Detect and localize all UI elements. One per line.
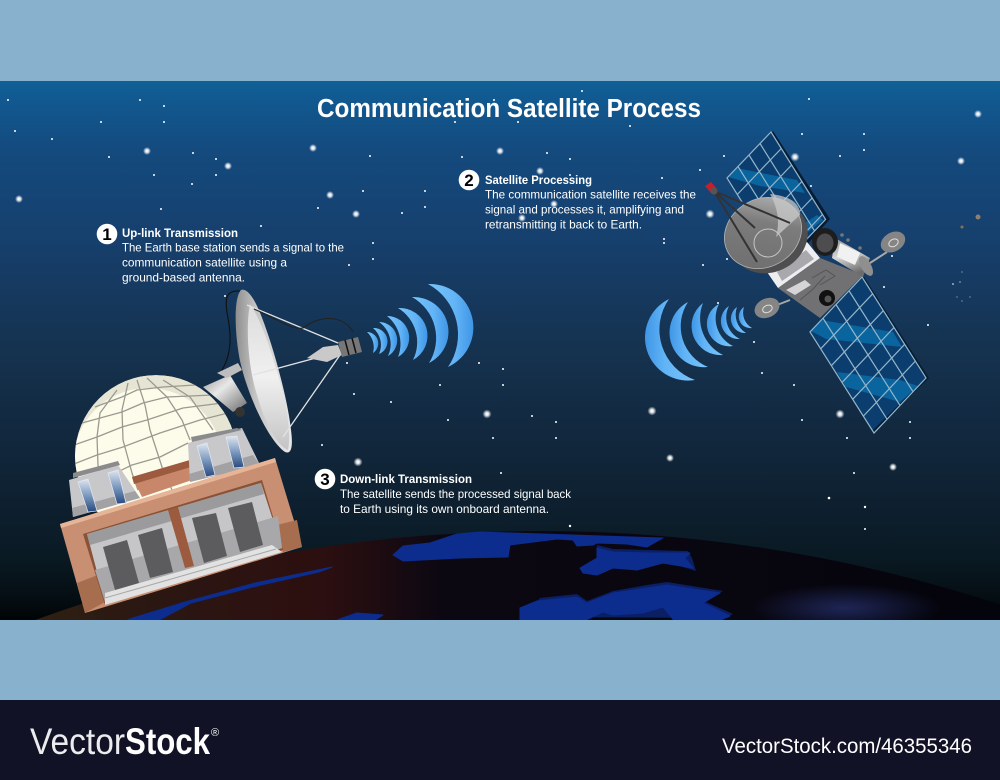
- right side annex: [188, 428, 260, 482]
- uplink signal waves: [367, 284, 473, 367]
- continent shadows: [523, 545, 733, 618]
- continents: [128, 532, 730, 620]
- step 3 heading: Down-link Transmission: [340, 472, 472, 486]
- step 1 description: The Earth base station sends a signal to the: [122, 241, 344, 255]
- VectorStock logo: Stock: [125, 721, 210, 762]
- step 2 description: signal and processes it, amplifying and: [485, 203, 684, 217]
- step 3 number badge: 3: [320, 470, 330, 489]
- satellite main dish: [711, 184, 821, 287]
- downlink signal waves: [645, 299, 752, 381]
- step 1 number badge: [97, 224, 117, 244]
- satellite: [705, 131, 929, 433]
- callout: step 2 satellite processing: [459, 170, 696, 232]
- atmospheric haze: [750, 572, 940, 620]
- dome: [75, 375, 232, 512]
- step 3 description: to Earth using its own onboard antenna.: [340, 502, 549, 516]
- step 3 number badge: [315, 469, 335, 489]
- step 2 description: retransmitting it back to Earth.: [485, 218, 642, 232]
- step 1 description: ground-based antenna.: [122, 271, 245, 285]
- ground station: [60, 290, 362, 613]
- bottom light-blue band: [0, 620, 1000, 700]
- VectorStock logo: ®: [211, 727, 219, 739]
- entrance steps: [105, 545, 282, 605]
- planet earth: [35, 531, 1000, 620]
- solar panel: upper: [727, 131, 830, 266]
- satellite instrument cylinder: [812, 228, 876, 278]
- space background: [0, 81, 1000, 620]
- step 1 description: communication satellite using a: [122, 256, 287, 270]
- step 2 description: The communication satellite receives the: [485, 188, 696, 202]
- step 1 number badge: 1: [102, 225, 112, 244]
- title: Communication Satellite Process: [317, 95, 701, 123]
- satellite body: [767, 242, 863, 318]
- dish mount: [203, 363, 247, 417]
- antenna struts and feed horn: [222, 291, 362, 437]
- image ID: VectorStock.com/46355346: [722, 735, 972, 758]
- antenna dish: [236, 290, 292, 453]
- dome base band: [132, 460, 192, 497]
- satellite feed arm: [705, 182, 790, 262]
- step 3 description: [340, 487, 571, 516]
- step 1 description: [122, 241, 344, 285]
- brick facade: [60, 458, 302, 613]
- doors and windows: [103, 502, 263, 590]
- footer bar: [0, 700, 1000, 780]
- top light-blue band: [0, 0, 1000, 81]
- step 2 heading: Satellite Processing: [485, 173, 592, 187]
- VectorStock logo: Vector: [30, 721, 125, 762]
- left side annex: [69, 461, 140, 517]
- callout: step 3 down-link transmission: [315, 469, 571, 516]
- step 2 description: [485, 188, 696, 232]
- stars: [7, 90, 982, 530]
- VectorStock logo: [30, 721, 219, 762]
- step 3 description: The satellite sends the processed signal back: [340, 487, 571, 501]
- solar panel: lower: [810, 277, 929, 433]
- step 2 number badge: [459, 170, 479, 190]
- callout: step 1 up-link transmission: [97, 224, 344, 285]
- step 2 number badge: 2: [464, 171, 474, 190]
- step 1 heading: Up-link Transmission: [122, 226, 238, 240]
- satellite arms and small dishes: [751, 227, 909, 322]
